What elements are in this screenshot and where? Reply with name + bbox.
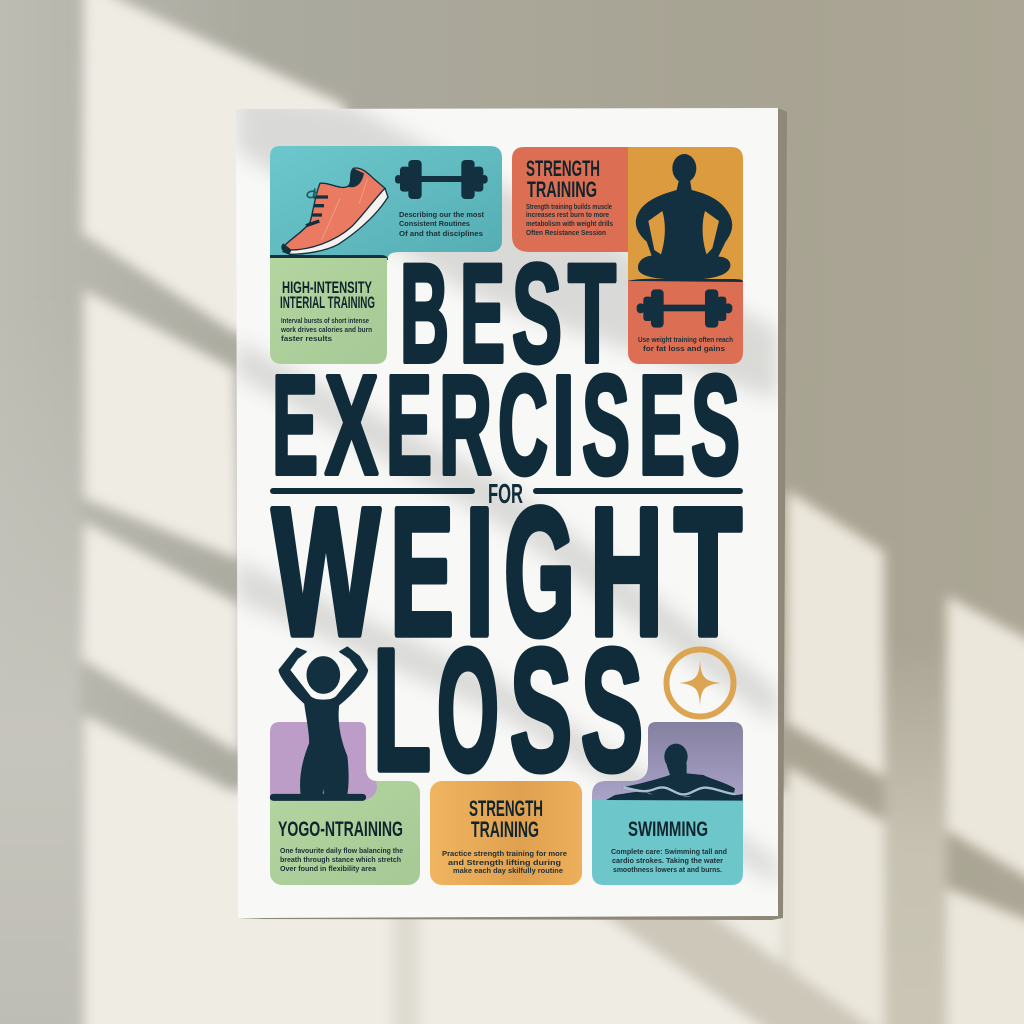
heading: YOGO-NTRAINING — [278, 818, 403, 841]
icon: running shoe — [281, 168, 388, 254]
body text — [611, 849, 727, 874]
panel: high-intensity interval training — [270, 258, 387, 364]
body text: Often Resistance Session — [526, 230, 606, 237]
heading: HIGH-INTENSITY — [282, 278, 372, 297]
purple backdrop — [270, 722, 377, 800]
panel: yoga training — [270, 647, 420, 885]
heading: STRENGTH — [469, 796, 543, 821]
ground line under shoe — [270, 255, 388, 260]
title: BEST: S — [512, 234, 562, 392]
title: WEIGHT: E — [390, 470, 454, 674]
icon: dumbbell — [395, 160, 488, 199]
icon: seated silhouette — [636, 154, 732, 280]
body text: Practice strength training for more — [442, 851, 567, 858]
body text: smoothness lowers at and burns. — [613, 867, 722, 874]
body text — [280, 318, 372, 343]
heading — [469, 796, 543, 842]
body text: Complete care: Swimming tall and — [611, 849, 727, 856]
title: WEIGHT: H — [590, 470, 663, 674]
title: BEST: B — [400, 234, 449, 392]
title: WEIGHT: T — [674, 470, 742, 674]
heading — [526, 156, 600, 202]
panel: strength training bottom — [430, 781, 582, 885]
title: LOSS: S — [581, 612, 643, 806]
title: WEIGHT: G — [504, 470, 575, 674]
title: LOSS: O — [437, 612, 499, 806]
heading: TRAINING — [527, 177, 597, 202]
body text: metabolism with weight drills — [526, 221, 613, 228]
body text: work drives calories and burn — [280, 327, 372, 334]
panel: seated figure — [628, 147, 743, 280]
title: EXERCISES: E — [639, 346, 685, 504]
body text: cardio strokes. Taking the water — [612, 858, 723, 865]
title: EXERCISES: X — [325, 346, 378, 504]
title: EXERCISES: S — [691, 346, 740, 504]
heading: STRENGTH — [526, 156, 600, 181]
panel: strength training top — [512, 147, 628, 252]
body text: Strength training builds muscle — [526, 204, 612, 211]
body text — [526, 204, 613, 237]
divider with the word FOR: FOR — [488, 478, 523, 509]
title: WEIGHT: I — [465, 470, 494, 674]
body text — [442, 851, 567, 875]
body text — [280, 848, 403, 873]
icon: gold star badge — [666, 650, 734, 716]
soft band shadows under the poster — [392, 905, 420, 1024]
title: EXERCISES: C — [498, 346, 548, 504]
heading — [280, 278, 375, 312]
title: BEST: E — [460, 234, 505, 392]
icon: swimmer silhouette — [606, 744, 743, 801]
title: BEST: T — [568, 234, 616, 392]
window shadow bands across poster — [236, 90, 778, 885]
card body text: Of and that disciplines — [399, 231, 483, 238]
title: LOSS: S — [510, 612, 572, 806]
body text: Use weight training often reach — [638, 337, 733, 344]
icon: dumbbell — [637, 289, 732, 328]
heading: SWIMMING — [628, 818, 708, 841]
poster sheet — [236, 108, 778, 918]
base line — [628, 279, 743, 282]
icon: yoga silhouette — [271, 647, 367, 800]
heading: TRAINING — [471, 817, 539, 842]
title: EXERCISES: S — [582, 346, 630, 504]
title: LOSS: L — [373, 612, 431, 806]
card body text: Consistent Routines — [399, 221, 470, 228]
panel: swimming — [592, 722, 743, 885]
body text: One favourite daily flow balancing the — [280, 848, 403, 855]
title: EXERCISES: R — [439, 346, 492, 504]
body text: increases rest burn to more — [526, 212, 609, 219]
title: EXERCISES: E — [386, 346, 432, 504]
body text: Interval bursts of short intense — [281, 318, 369, 325]
body text — [638, 337, 733, 353]
divider with the word FOR — [270, 478, 743, 509]
title: EXERCISES: E — [272, 346, 318, 504]
body text: for fat loss and gains — [643, 346, 725, 353]
heading: INTERIAL TRAINING — [280, 293, 375, 312]
body text: make each day skilfully routine — [453, 868, 563, 875]
panel: dumbbell card — [628, 279, 743, 364]
title: EXERCISES: I — [552, 346, 575, 504]
title: WEIGHT: W — [272, 470, 380, 674]
card body text — [399, 212, 485, 238]
body text: and Strength lifting during — [448, 860, 561, 867]
body text: breath through stance which stretch — [280, 857, 401, 864]
panel: running shoe and dumbbell card — [270, 146, 502, 260]
body text: Over found in flexibility area — [280, 866, 376, 873]
card body text: Describing our the most — [399, 212, 485, 219]
body text: faster results — [281, 336, 332, 343]
poster drop shadow — [238, 108, 787, 920]
